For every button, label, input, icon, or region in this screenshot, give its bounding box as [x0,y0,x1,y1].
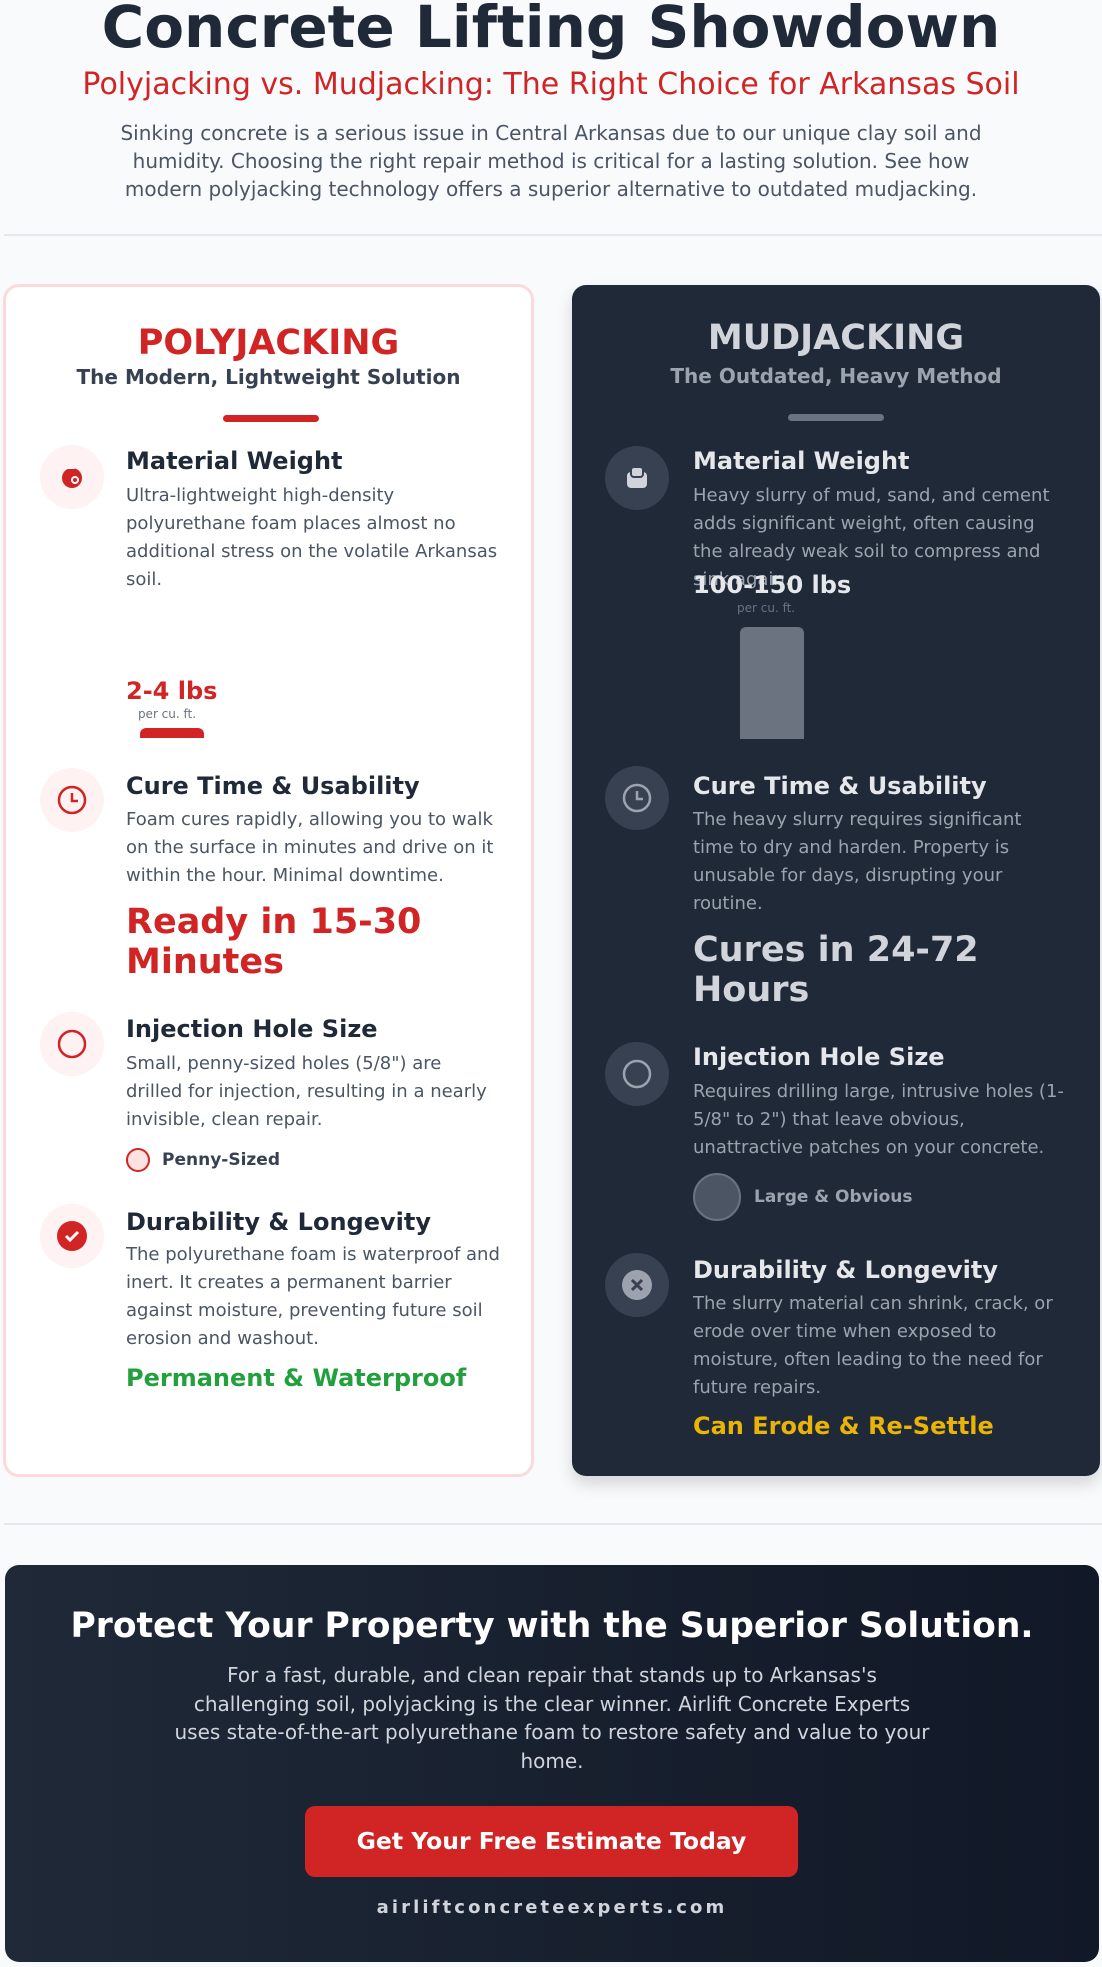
item: hole size [40,1012,487,1172]
item: cure time: Cure Time & Usability [693,772,987,800]
item: durability [605,1253,1053,1440]
intro text: Sinking concrete is a serious issue in Central Arkansas due to our unique clay soil and humidity. Choosing the right repair method is critical for a lasting solution. See how modern polyjacking technology offers a superior alternative to outdated mudjacking. [120,121,982,201]
item: hole size: Small, penny-sized holes (5/8") are drilled for injection, resulting in a nearly invisible, clean repair. [126,1053,487,1130]
cta text: For a fast, durable, and clean repair that stands up to Arkansas's challenging soil, polyjacking is the clear winner. Airlift Concrete Experts uses state-of-the-art polyurethane foam to restore safety and value to your home. [174,1663,930,1772]
subheading: The Modern, Lightweight Solution [77,365,460,389]
badge: penny-sized: Penny-Sized [162,1150,280,1170]
item: cure time: The heavy slurry requires significant time to dry and harden. Property is unusable for days, disrupting your routine. [693,809,1021,914]
badge: large & obvious [693,1173,912,1221]
icon: clock [605,766,669,830]
icon: check [40,1204,104,1268]
panel: polyjacking [3,284,534,1477]
item: cure time: Cure Time & Usability [126,772,420,800]
item: cure time [605,766,1021,1010]
panel: mudjacking [572,285,1100,1476]
cta heading: Protect Your Property with the Superior Solution. [71,1606,1033,1646]
stat: 100-150 lbs bar: per cu. ft. [737,601,795,615]
text: Material Weight [126,447,343,475]
cta panel [5,1565,1099,1962]
item: material weight: Ultra-lightweight high-density polyurethane foam places almost no additional stress on the volatile Arkansas soil. [126,485,497,590]
heading: mudjacking: MUDJACKING [708,318,964,358]
item: cure time: Foam cures rapidly, allowing you to walk on the surface in minutes and drive on it within the hour. Minimal downtime. [126,809,493,886]
icon: hole [605,1042,669,1106]
button: Get Your Free Estimate Today [357,1827,746,1855]
stat: 100-150 lbs bar [693,571,851,739]
icon: bucket [605,446,669,510]
icon: x [605,1253,669,1317]
icon: hole [40,1012,104,1076]
item: hole size: Requires drilling large, intrusive holes (1-5/8" to 2") that leave obvious, unattractive patches on your concrete. [693,1081,1064,1158]
subtitle: Polyjacking vs. Mudjacking: The Right Choice for Arkansas Soil [82,67,1020,102]
badge: penny-sized [126,1148,280,1172]
item: hole size: Injection Hole Size [126,1015,378,1043]
icon: foam [40,445,104,509]
stat: 2-4 lbs: per cu. ft. [138,707,196,721]
subheading: The Outdated, Heavy Method [670,364,1002,388]
item: cure time [40,768,493,982]
stat: cures in: Cures in 24-72 Hours [693,930,979,1010]
button [305,1806,798,1877]
item: durability: The polyurethane foam is waterproof and inert. It creates a permanent barrier against moisture, preventing future soil erosion and washout. [126,1244,500,1349]
item: hole size: Injection Hole Size [693,1043,945,1071]
stat: can erode: Can Erode & Re-Settle [693,1412,994,1440]
heading: polyjacking: POLYJACKING [138,323,399,363]
icon: clock [40,768,104,832]
stat: 2-4 lbs: 2-4 lbs [126,677,217,705]
website url: airliftconcreteexperts.com [377,1897,727,1918]
item: material weight [605,446,1050,739]
stat: ready in: Ready in 15-30 Minutes [126,902,421,982]
item: material weight: Material Weight [693,447,910,475]
item: durability: The slurry material can shrink, crack, or erode over time when exposed to moisture, often leading to the need for future repairs. [693,1293,1053,1398]
item: durability: Durability & Longevity [126,1208,431,1236]
stat: permanent: Permanent & Waterproof [126,1364,466,1392]
stat: 100-150 lbs bar: 100-150 lbs [693,571,851,599]
badge: large & obvious: Large & Obvious [754,1187,912,1207]
item: material weight: Heavy slurry of mud, sand, and cement adds significant weight, often causing the already weak soil to compress and sink again. [693,485,1050,590]
item: durability: Durability & Longevity [693,1256,998,1284]
stat: 2-4 lbs [126,677,217,738]
item: hole size [605,1042,1064,1221]
item: material weight [40,445,497,738]
item: durability [40,1204,500,1392]
